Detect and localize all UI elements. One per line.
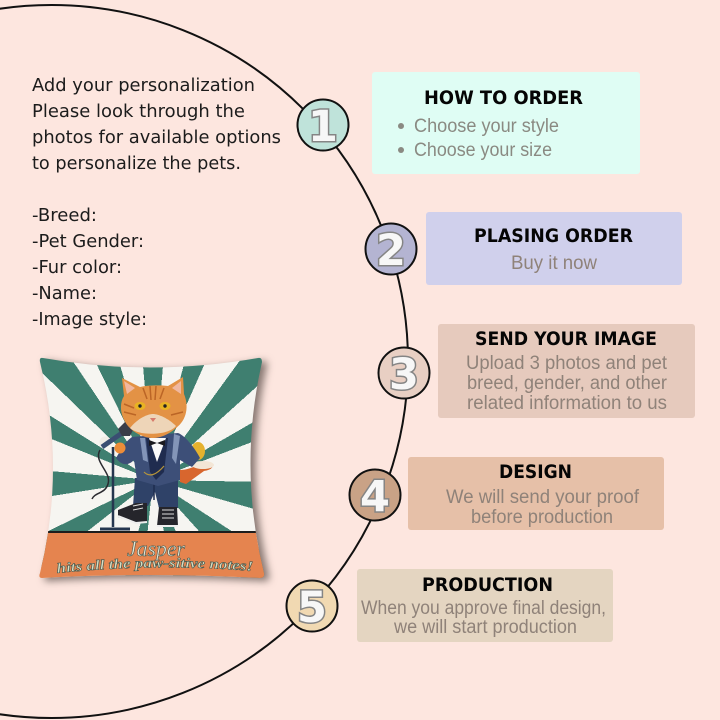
step 2 badge (366, 224, 416, 276)
cat legs (133, 478, 178, 508)
microphone (102, 421, 134, 447)
step 4 panel (408, 457, 664, 530)
step 4 panel: We will send your proof (446, 487, 640, 508)
intro text block: photos for available options (32, 127, 281, 148)
step 4 panel: before production (471, 507, 613, 528)
step 1 panel: Choose your style (414, 116, 559, 137)
step 1 panel: Choose your size (414, 140, 552, 161)
intro text block: Add your personalization (32, 75, 255, 96)
step 3 panel (438, 324, 695, 418)
intro text block: to personalize the pets. (32, 153, 241, 174)
step 2 panel: Buy it now (511, 253, 597, 274)
step 1 badge: 1 (308, 102, 338, 152)
step 1 panel (372, 72, 640, 174)
step 4 badge (350, 470, 400, 522)
pillow caption name: Jasper (127, 536, 185, 561)
step 4 badge: 4 (360, 472, 390, 522)
intro text block: Please look through the (32, 101, 245, 122)
intro text block: -Fur color: (32, 257, 122, 278)
step 3 panel: SEND YOUR IMAGE (475, 328, 657, 350)
intro text block: -Name: (32, 283, 97, 304)
step 5 badge (286, 580, 338, 633)
step 3 badge: 3 (389, 350, 419, 400)
step 2 panel (426, 212, 682, 285)
step 4 panel: DESIGN (499, 461, 572, 483)
step 5 badge: 5 (297, 583, 327, 633)
intro text block (32, 75, 281, 330)
cat head (121, 377, 187, 438)
cat jacket (100, 433, 200, 486)
pillow caption tagline: hits all the paw-sitive notes! (56, 558, 253, 574)
step 3 panel: related information to us (467, 393, 667, 414)
intro text block: -Pet Gender: (32, 231, 144, 252)
step 5 panel: PRODUCTION (422, 574, 553, 596)
pillow product image (39, 356, 274, 586)
step 3 panel: Upload 3 photos and pet (466, 353, 668, 374)
step 5 panel: we will start production (393, 617, 577, 638)
step 1 badge (298, 100, 348, 152)
step 3 panel: breed, gender, and other (467, 373, 668, 394)
cat tail and cup (180, 442, 214, 484)
intro text block: -Image style: (32, 309, 147, 330)
step 2 badge: 2 (376, 226, 406, 276)
step 1 panel: HOW TO ORDER (424, 87, 583, 109)
step 2 panel: PLASING ORDER (474, 225, 633, 247)
intro text block: -Breed: (32, 205, 97, 226)
timeline arc (0, 5, 408, 718)
cat illustration and caption (56, 377, 253, 574)
cat shoes (118, 503, 178, 526)
step 5 panel: When you approve final design, (361, 598, 606, 619)
step 3 badge (378, 348, 430, 400)
microphone stand (92, 447, 130, 529)
step 5 panel (357, 569, 613, 642)
